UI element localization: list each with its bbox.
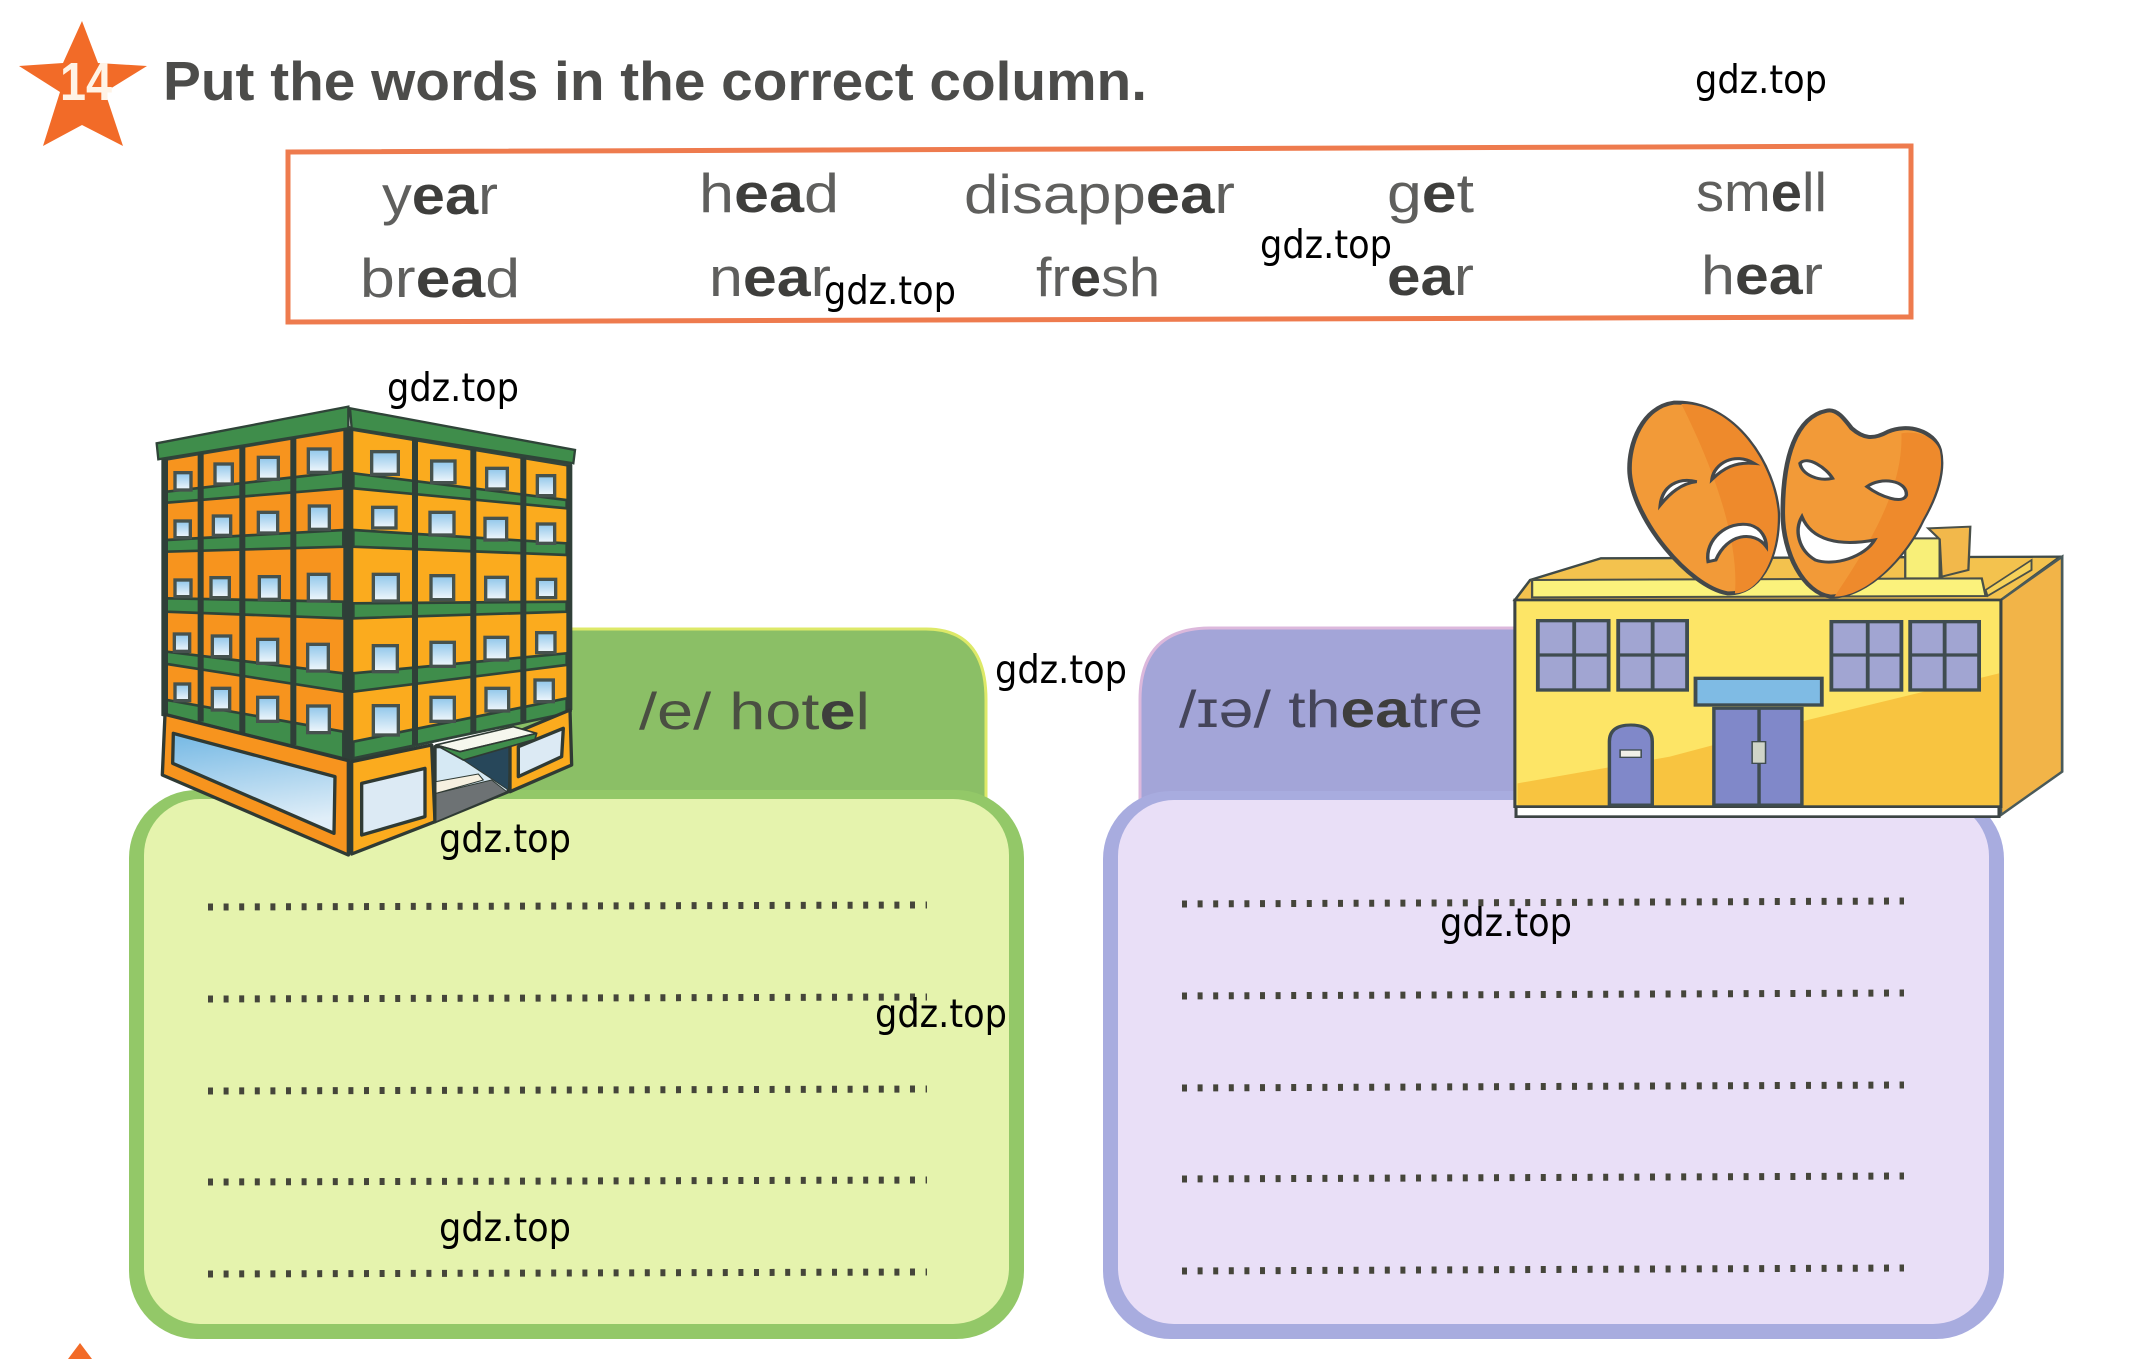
watermark gdz.top 7: gdz.top (1440, 901, 1572, 946)
comedy mask (1783, 410, 1941, 597)
answer lines (1182, 901, 1904, 1271)
tragedy mask (1630, 403, 1778, 593)
green balconies (167, 472, 567, 758)
word: smell: smell (1696, 161, 1827, 223)
word: bread: bread (360, 247, 520, 309)
base strip (1516, 807, 1999, 817)
icon: orange star with number 14: 14 (60, 52, 112, 112)
purple heading tab (1140, 628, 1530, 815)
purple answer area (1118, 800, 1989, 1324)
watermark gdz.top 9: gdz.top (439, 1206, 571, 1251)
word: ear: ear (1387, 245, 1474, 307)
word: head: head (699, 162, 839, 224)
purple answer border (1103, 791, 2004, 1339)
sign over door (1696, 678, 1822, 705)
answer lines (208, 905, 927, 1274)
word: hear: hear (1701, 244, 1823, 306)
icon: theatre building with masks (1515, 403, 2062, 817)
watermark gdz.top 5: gdz.top (995, 648, 1127, 693)
hotel walls (163, 428, 348, 760)
word: disappear: disapp ear (964, 163, 1235, 225)
heading: /ɪə/ theatre: /ɪə/ th eatre (1179, 681, 1483, 739)
icon: star tip at page bottom (68, 1343, 92, 1359)
panel: green /e/ column (129, 629, 1024, 1339)
icon: orange star with number 14 (19, 21, 147, 146)
theatre roof (1515, 557, 2060, 600)
title: Put the words in the correct column. (163, 50, 1147, 112)
watermark gdz.top 2: gdz.top (1260, 223, 1392, 268)
panel: purple /ɪə/ column (1103, 628, 2004, 1339)
watermark gdz.top 6: gdz.top (439, 817, 571, 862)
side wall (2001, 557, 2062, 815)
watermark gdz.top 4: gdz.top (387, 366, 519, 411)
green answer area (144, 799, 1009, 1324)
roof ledge (1532, 578, 1986, 597)
windows (1538, 621, 1979, 690)
word: year: year (382, 164, 498, 226)
panel: word box (288, 146, 1911, 322)
roof (157, 407, 575, 463)
icon: hotel building (157, 407, 575, 855)
ground floor (162, 710, 572, 855)
watermark gdz.top 8: gdz.top (875, 992, 1007, 1037)
main door (1714, 708, 1802, 805)
dark columns (165, 428, 569, 760)
word: fresh: fresh (1036, 246, 1160, 308)
heading: /e/ hotel: /e/ hot el (639, 683, 870, 741)
watermark gdz.top 1: gdz.top (1695, 58, 1827, 103)
side door (1609, 725, 1652, 805)
word: near: near (709, 246, 831, 308)
green heading tab (500, 629, 986, 815)
watermark gdz.top 3: gdz.top (824, 269, 956, 314)
rooftop block (1905, 527, 1970, 578)
word: get: get (1387, 162, 1474, 224)
green answer border (129, 790, 1024, 1339)
windows (174, 449, 556, 735)
front wall (1515, 600, 2001, 807)
green tab edge glow (570, 629, 986, 800)
